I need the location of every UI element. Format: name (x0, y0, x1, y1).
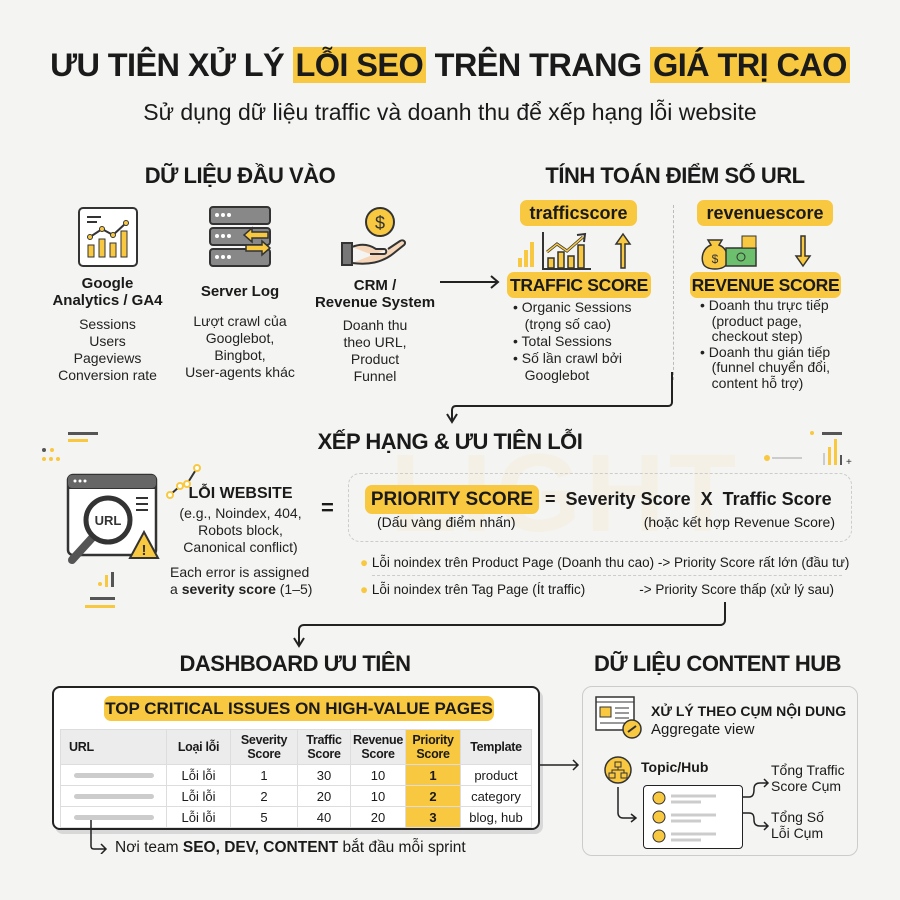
heading: input data: DỮ LIỆU ĐẦU VÀO (145, 163, 335, 188)
text: total traffic (771, 762, 845, 794)
text block: website errors (170, 484, 312, 597)
table: Priority (412, 733, 454, 747)
icon: traffic chart (518, 232, 632, 270)
list: traffic score: • Organic Sessions (513, 299, 632, 315)
table (60, 729, 532, 828)
text: server log: Lượt crawl của (193, 313, 287, 329)
table: 10 (371, 788, 385, 804)
table: Revenue (353, 733, 403, 747)
list: traffic score: • Total Sessions (513, 333, 612, 349)
list: revenue score: • Doanh thu trực tiếp (700, 297, 829, 313)
note: revenue: (hoặc kết hợp Revenue Score) (644, 514, 835, 530)
text: CRM (343, 317, 407, 384)
table: blog, hub (469, 810, 523, 824)
table: Lỗi lỗi (182, 788, 215, 804)
heading: content hub: DỮ LIỆU CONTENT HUB (594, 651, 841, 676)
list: revenue score: checkout step) (712, 328, 803, 344)
icon: money (702, 235, 812, 270)
table: 5 (260, 810, 268, 824)
arrow: hub to list (617, 787, 638, 823)
text: CRM: theo URL, (343, 334, 407, 350)
pill: table title: TOP CRITICAL ISSUES ON HIGH-VALUE PAGES (105, 699, 493, 718)
text block: website errors: Robots block, (198, 522, 283, 538)
icon: trend dots (166, 464, 201, 499)
table: Lỗi lỗi (182, 768, 215, 782)
pill: trafficscore: trafficscore (529, 203, 628, 223)
label: topic/hub: Topic/Hub (641, 759, 708, 775)
table: URL (69, 740, 94, 754)
panel: content hub (582, 686, 858, 856)
list: traffic score: (trọng số cao) (525, 316, 611, 332)
pill: revenuescore: revenuescore (706, 203, 824, 223)
note: yellow: (Dấu vàng điểm nhấn) (377, 514, 516, 530)
icon: server (209, 206, 271, 267)
text: GA4 metrics: Sessions (79, 316, 136, 332)
text: server log: Bingbot, (214, 347, 266, 363)
icon: URL magnifier: ! (142, 542, 146, 559)
label: GA4: Analytics / GA4 (52, 292, 163, 309)
list card (643, 785, 743, 849)
text: GA4 metrics: Users (89, 333, 126, 349)
text: server log: Googlebot, (206, 330, 274, 346)
icon: page link (595, 696, 642, 739)
list: traffic score: Googlebot (525, 367, 589, 383)
example: low: -> Priority Score thấp (xử lý sau) (639, 582, 834, 597)
panel: dashboard (52, 686, 540, 830)
table: Score (307, 747, 341, 761)
table: Traffic (306, 733, 342, 747)
formula box (348, 473, 852, 542)
arrow: inputs to scores (440, 275, 500, 289)
text block: website errors: LỖI WEBSITE (188, 485, 292, 502)
panel: traffic score (507, 200, 651, 383)
icon: hand coin: $ (375, 213, 385, 233)
list: revenue score: (product page, (712, 312, 802, 328)
text block: website errors: a severity score (1–5) (170, 581, 312, 597)
text: total errors: Tổng Số (771, 809, 824, 825)
example: low: ● Lỗi noindex trên Tag Page (Ít traffic) (360, 582, 585, 597)
text: server log: User-agents khác (185, 364, 295, 380)
text: total errors: Lỗi Cụm (771, 825, 823, 841)
table: 2 (429, 788, 437, 804)
subtitle: Sử dụng dữ liệu traffic và doanh thu để xếp hạng lỗi website (143, 99, 757, 125)
icon: analytics (78, 207, 138, 267)
list: traffic score (513, 299, 632, 383)
table: 2 (260, 788, 268, 804)
icon: money: $ (712, 252, 719, 266)
table: 1 (260, 768, 268, 782)
text: CRM: Doanh thu (343, 317, 407, 333)
pill: trafficscore (520, 200, 637, 226)
formula: = Severity Score X Traffic Score (545, 489, 832, 509)
table: 30 (317, 768, 331, 782)
text: aggregate: Aggregate view (651, 721, 754, 738)
label: CRM: CRM / (354, 277, 396, 294)
table: category (471, 788, 521, 804)
text: total traffic: Score Cụm (771, 778, 841, 794)
text: CRM: Product (351, 351, 399, 367)
label: GA4: Google (82, 275, 133, 292)
pill: revenuescore (697, 200, 833, 226)
table: 20 (317, 788, 331, 804)
text: GA4 metrics: Pageviews (74, 350, 141, 366)
text block: website errors: (e.g., Noindex, 404, (179, 505, 302, 521)
panel: GA4 (52, 207, 163, 383)
panel: revenue score (690, 200, 841, 391)
table: Loại lỗi (178, 740, 219, 754)
icon: URL magnifier (66, 474, 160, 564)
panel: CRM (315, 207, 435, 384)
list: traffic score: • Số lần crawl bởi (513, 350, 622, 366)
arrow: footnote (90, 820, 107, 854)
heading: ranking: XẾP HẠNG & ƯU TIÊN LỖI (318, 429, 582, 454)
label: GA4 (52, 275, 163, 309)
text: total errors (771, 809, 824, 841)
list: revenue score: content hỗ trợ) (712, 374, 803, 390)
icon: hand coin (341, 207, 406, 266)
arrow: ranking to dashboard (293, 602, 726, 648)
text: total traffic: Tổng Traffic (771, 762, 845, 778)
table: 10 (371, 768, 385, 782)
decorations left bottom (85, 572, 115, 608)
label: CRM (315, 277, 435, 311)
icon: topic hub (604, 756, 632, 784)
label: server log: Server Log (201, 283, 279, 300)
decorations right (764, 431, 852, 468)
arrows: to totals (743, 778, 769, 830)
text: GA4 metrics (58, 316, 157, 383)
text block: website errors: Canonical conflict) (183, 539, 298, 555)
pill: TRAFFIC SCORE: TRAFFIC SCORE (510, 275, 648, 295)
watermark: LIGHT (390, 432, 740, 555)
list: revenue score: • Doanh thu gián tiếp (700, 344, 830, 360)
decorations right: + (846, 457, 852, 468)
arrow: dashboard to hub (540, 760, 579, 770)
table: Lỗi lỗi (182, 810, 215, 824)
title: ƯU TIÊN XỬ LÝ LỖI SEO TRÊN TRANG GIÁ TRỊ CAO (50, 47, 847, 83)
text: server log (185, 313, 295, 380)
table: 1 (429, 768, 437, 782)
text: CRM: Funnel (354, 368, 396, 384)
arrow: scores to ranking (446, 372, 673, 424)
table: Template (470, 740, 522, 754)
list: revenue score (700, 297, 830, 391)
divider (673, 205, 674, 380)
heading: dashboard: DASHBOARD ƯU TIÊN (180, 651, 410, 676)
table: Score (247, 747, 281, 761)
panel: server log (185, 206, 295, 380)
pill: PRIORITY SCORE: PRIORITY SCORE (371, 489, 533, 510)
example: high: ● Lỗi noindex trên Product Page (Doanh thu cao) -> Priority Score rất lớn (đầu tư) (360, 555, 849, 570)
equals sign: = (321, 495, 334, 520)
pill: REVENUE SCORE: REVENUE SCORE (692, 275, 839, 295)
label: CRM: Revenue System (315, 294, 435, 311)
table: 20 (371, 810, 385, 824)
footnote: Nơi team SEO, DEV, CONTENT bắt đầu mỗi sprint (115, 839, 466, 856)
decorations (42, 432, 98, 461)
table: product (474, 768, 518, 782)
text: cluster title: XỬ LÝ THEO CỤM NỘI DUNG (651, 703, 846, 719)
table: Score (416, 747, 450, 761)
table: Score (361, 747, 395, 761)
icon: URL magnifier: URL (95, 513, 121, 528)
heading: URL score: TÍNH TOÁN ĐIỂM SỐ URL (545, 163, 805, 188)
example: low (360, 582, 834, 597)
text block: website errors: Each error is assigned (170, 564, 309, 580)
table: 3 (429, 810, 437, 824)
list: revenue score: (funnel chuyển đổi, (712, 359, 830, 375)
table: Severity (241, 733, 287, 747)
text: GA4 metrics: Conversion rate (58, 367, 157, 383)
table: 40 (317, 810, 331, 824)
pill: PRIORITY SCORE (365, 485, 539, 514)
